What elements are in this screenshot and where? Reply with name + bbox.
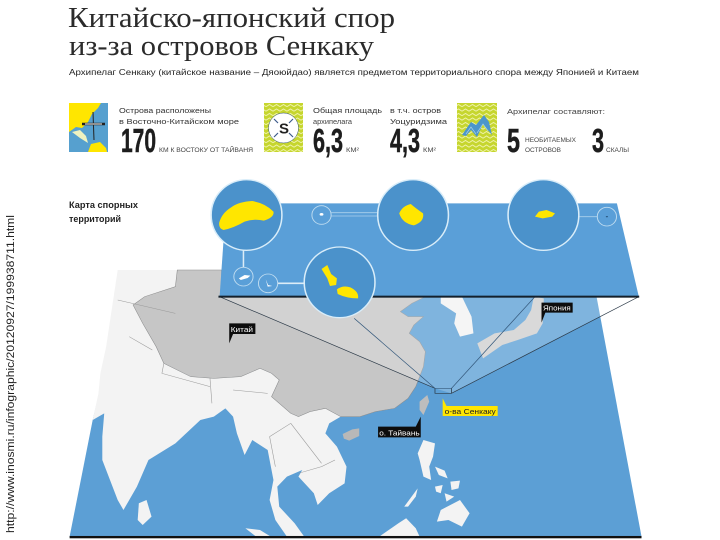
title: Китайско-японский спор	[68, 3, 395, 34]
connectors	[243, 213, 597, 283]
title: из-за островов Сенкаку	[69, 31, 374, 62]
map of Asia	[70, 270, 642, 538]
panel bottom rule	[218, 296, 639, 298]
circle: island 3	[508, 180, 579, 250]
label: Japan	[542, 303, 573, 323]
number: 5: 5	[507, 122, 520, 159]
projection cone	[220, 297, 639, 393]
label: Senkaku islands: о-ва Сенкаку	[445, 408, 496, 416]
land: India and Southeast Asia	[93, 270, 347, 537]
land: Borneo and Sumatra	[245, 518, 420, 537]
stat: location: в Восточно-Китайском море	[119, 117, 239, 126]
panel: islands close-up	[211, 180, 639, 318]
number: 3: 3	[592, 122, 604, 159]
stat: area	[264, 103, 448, 159]
land: Taiwan	[420, 395, 429, 415]
label: Senkaku islands	[443, 398, 498, 416]
label: Japan: Япония	[543, 304, 571, 313]
circle: island 4	[304, 247, 375, 318]
stat: composition: НЕОБИТАЕМЫХ	[525, 138, 576, 144]
stat: area: КМ²	[346, 148, 359, 154]
icon: area circle	[264, 103, 303, 152]
land: Hainan	[343, 428, 359, 441]
circle: island 1	[211, 180, 282, 250]
label: Taiwan: о. Тайвань	[379, 429, 420, 437]
land: Sri Lanka	[138, 500, 152, 525]
panel background	[220, 203, 639, 297]
number: 170 km: 170	[121, 122, 156, 159]
stat: composition: СКАЛЫ	[606, 148, 629, 154]
number: 4.3: 4,3	[390, 122, 420, 159]
label: China: Китай	[231, 326, 253, 334]
circle: island 2	[378, 180, 448, 250]
stat: location	[69, 103, 253, 159]
icon: location map	[69, 103, 108, 152]
small islands	[239, 213, 323, 287]
heading: map: территорий	[69, 214, 121, 224]
text: total area: Общая площадь	[313, 106, 382, 115]
label: China	[229, 323, 255, 343]
land: Philippines	[404, 440, 470, 527]
stat: area: архипелага	[313, 117, 353, 126]
projection lines	[220, 297, 639, 393]
land: China	[133, 270, 425, 417]
map bottom rule	[70, 536, 642, 538]
icon: mountains	[457, 103, 497, 152]
source url, rotated: http://www.inosmi.ru/infographic/20120927/199938711.html	[5, 215, 17, 533]
stat: area: КМ²	[423, 148, 436, 154]
land: Korea	[441, 297, 473, 337]
text: location: Острова расположены	[119, 106, 211, 115]
title	[68, 3, 395, 62]
land: Japan	[477, 297, 544, 358]
sea	[70, 280, 642, 537]
stat: composition	[457, 103, 629, 159]
text: Uotsuri island: в т.ч. остров	[390, 106, 441, 115]
stat: composition: ОСТРОВОВ	[525, 148, 561, 154]
text: composition: Архипелаг составляют:	[507, 107, 605, 116]
heading: map	[69, 200, 138, 224]
borders	[118, 300, 335, 473]
number: 6.3: 6,3	[313, 122, 343, 159]
heading: map: Карта спорных	[69, 200, 138, 210]
subtitle: Архипелаг Сенкаку (китайское название – Дяоюйдао) является предметом территориального спора между Японией и Китаем	[69, 67, 639, 77]
icon: area circle: S	[279, 120, 289, 138]
small locator circles	[234, 206, 617, 293]
stat: location: КМ К ВОСТОКУ ОТ ТАЙВАНЯ	[159, 146, 253, 154]
label: Taiwan	[378, 417, 421, 437]
stat: area: Уоцуридзима	[390, 117, 448, 126]
